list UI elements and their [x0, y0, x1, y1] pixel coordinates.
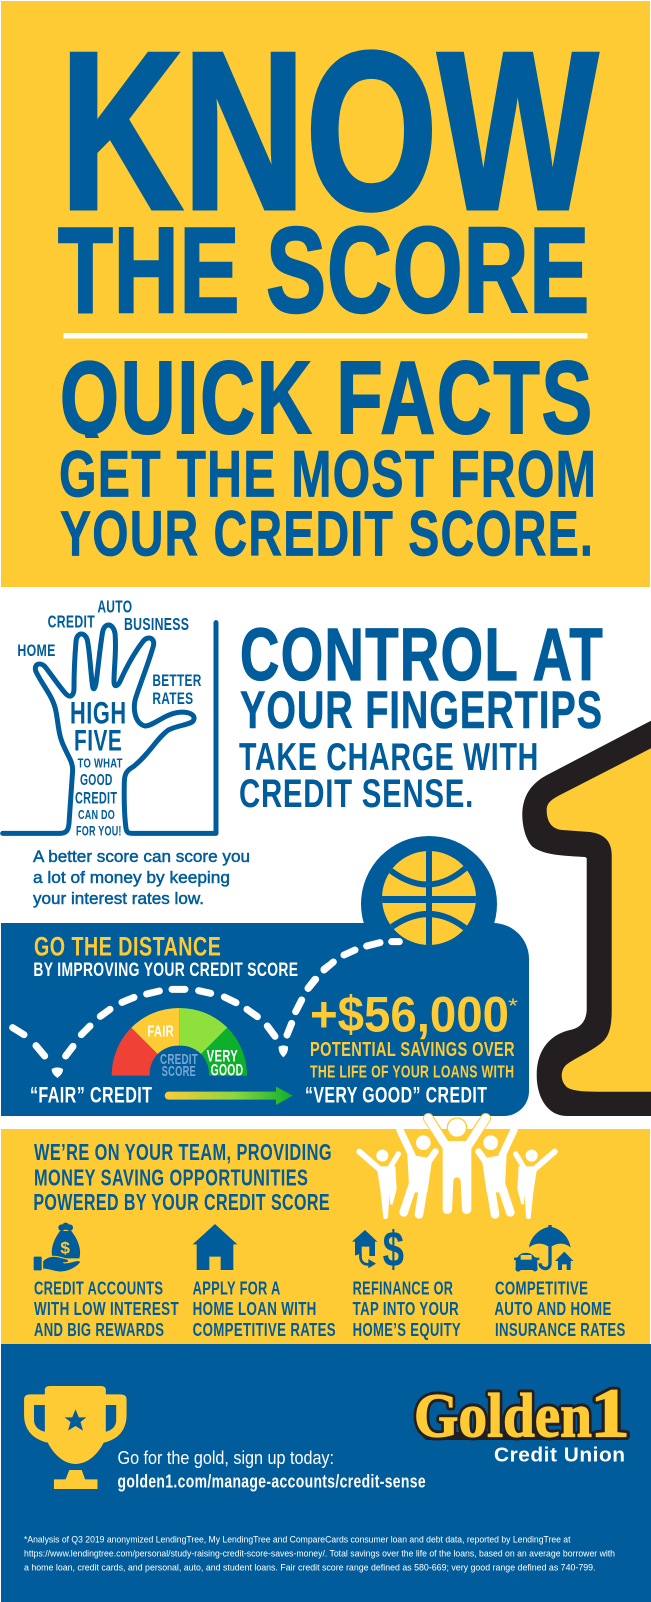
- heading: go the distance: GO THE DISTANCE: [34, 932, 221, 962]
- text: footnote: [24, 1535, 615, 1574]
- icon: house with arrow and dollar: [352, 1221, 404, 1277]
- bounce path left: [13, 966, 328, 1078]
- icon: basketball: [361, 836, 497, 945]
- text: apply for a home loan: [193, 1277, 336, 1340]
- heading: on your team: MONEY SAVING OPPORTUNITIES: [34, 1164, 308, 1190]
- text: high five to what good credit can do for you: HIGH: [70, 695, 127, 730]
- text: refinance: REFINANCE OR: [353, 1277, 453, 1298]
- figure: small right: [516, 1150, 555, 1219]
- logo: Golden 1 Credit Union: [414, 1376, 630, 1467]
- panel: go the distance: [1, 836, 529, 1116]
- label: BETTER RATES: [152, 671, 202, 708]
- text: high five to what good credit can do for you: GOOD: [80, 772, 113, 789]
- text: call to action: [118, 1448, 426, 1492]
- icon: umbrella over car and home: [514, 1225, 573, 1272]
- icon: money bag and hand: [34, 1223, 81, 1272]
- text: better score body: your interest rates low.: [33, 889, 204, 908]
- label: HOME: HOME: [17, 641, 56, 660]
- text: potential savings: THE LIFE OF YOUR LOANS WITH: [310, 1061, 514, 1081]
- icon: house with arrow and dollar: $: [383, 1221, 404, 1277]
- text: better score body: A better score can score you: [33, 847, 250, 866]
- heading: control at your fingertips: [239, 613, 604, 816]
- bounce path right: [308, 942, 399, 988]
- chart: credit score gauge: CREDIT: [160, 1052, 198, 1068]
- text: high five to what good credit can do for you: CREDIT: [75, 789, 117, 807]
- text: high five to what good credit can do for you: CAN DO: [78, 807, 115, 822]
- text: refinance: HOME’S EQUITY: [353, 1319, 461, 1340]
- text: footnote: *Analysis of Q3 2019 anonymized LendingTree, My LendingTree and CompareCards consumer loan and debt data, reported by LendingTree at: [24, 1535, 571, 1546]
- heading: on your team: WE’RE ON YOUR TEAM, PROVIDING: [34, 1139, 332, 1165]
- chart: credit score gauge: VERY: [207, 1047, 238, 1066]
- icon: house: [193, 1224, 237, 1270]
- text: high five to what good credit can do for you: FIVE: [74, 725, 122, 758]
- stat: savings amount: *: [508, 995, 518, 1018]
- text: footnote: a home loan, credit cards, and personal, auto, and student loans. Fair credit score range defined as 580-669; very good range defined as 740-799.: [24, 1563, 596, 1574]
- text: apply for a home loan: HOME LOAN WITH: [193, 1298, 317, 1319]
- panel: header: [1, 1, 650, 587]
- stat: savings amount: +$56,000: [310, 987, 509, 1043]
- text: better score body: [33, 847, 250, 908]
- panel: footer: [1, 1344, 651, 1602]
- arrow: fair to very good: [165, 1087, 293, 1105]
- figure: tall left: [400, 1130, 435, 1214]
- figure: tall right: [479, 1130, 514, 1214]
- text: high five to what good credit can do for you: TO WHAT: [78, 755, 123, 770]
- logo: Golden 1 Credit Union: 1: [590, 1376, 630, 1452]
- text: credit accounts: [34, 1277, 179, 1340]
- logo: Golden 1 Credit Union: Golden: [414, 1382, 592, 1450]
- text: high five to what good credit can do for you: FOR YOU!: [76, 823, 122, 838]
- chart: credit score gauge: SCORE: [162, 1064, 196, 1080]
- text: credit accounts: CREDIT ACCOUNTS: [34, 1277, 163, 1298]
- icon: trophy: [24, 1386, 127, 1489]
- panel: high five hand: [3, 596, 216, 838]
- label: fair credit: “FAIR” CREDIT: [30, 1083, 152, 1108]
- label: BETTER RATES: BETTER: [152, 671, 202, 690]
- label: BUSINESS: BUSINESS: [124, 614, 189, 634]
- text: high five to what good credit can do for you: [70, 695, 127, 838]
- label: AUTO: AUTO: [97, 596, 132, 616]
- text: insurance: COMPETITIVE: [495, 1277, 588, 1298]
- logo: Golden 1 Credit Union: Golden: [414, 1382, 592, 1450]
- text: potential savings: POTENTIAL SAVINGS OVER: [310, 1038, 515, 1061]
- text: call to action: Go for the gold, sign up today:: [118, 1448, 334, 1468]
- heading: control at your fingertips: TAKE CHARGE WITH: [239, 736, 539, 779]
- heading: on your team: [33, 1139, 332, 1215]
- subheading: improving credit score: BY IMPROVING YOUR CREDIT SCORE: [33, 960, 298, 981]
- text: potential savings: [310, 1038, 515, 1081]
- text: better score body: a lot of money by keeping: [33, 868, 230, 887]
- chart: credit score gauge: GOOD: [211, 1061, 243, 1079]
- heading: on your team: POWERED BY YOUR CREDIT SCORE: [33, 1189, 330, 1215]
- text: refinance: TAP INTO YOUR: [353, 1298, 459, 1319]
- icon: hand outline: [3, 623, 216, 833]
- logo: Golden 1 Credit Union: 1: [590, 1376, 630, 1452]
- chart: credit score gauge: FAIR: [147, 1024, 174, 1041]
- heading: control at your fingertips: CREDIT SENSE.: [239, 772, 474, 816]
- chart: credit score gauge: [112, 1008, 247, 1080]
- text: call to action: golden1.com/manage-accounts/credit-sense: [118, 1470, 426, 1492]
- label: CREDIT: CREDIT: [48, 611, 95, 631]
- label: BETTER RATES: RATES: [152, 689, 193, 708]
- text: credit accounts: AND BIG REWARDS: [34, 1319, 164, 1340]
- text: apply for a home loan: APPLY FOR A: [193, 1277, 281, 1298]
- text: refinance: [353, 1277, 461, 1340]
- text: insurance: [494, 1277, 626, 1340]
- icon: big number one: [522, 721, 651, 1116]
- text: credit accounts: WITH LOW INTEREST: [34, 1298, 179, 1319]
- figure: small left: [359, 1150, 398, 1219]
- logo: Golden 1 Credit Union: Credit Union: [494, 1444, 626, 1467]
- figure: centre: [428, 1117, 486, 1214]
- text: apply for a home loan: COMPETITIVE RATES: [193, 1319, 336, 1340]
- icon: money bag and hand: $: [60, 1239, 71, 1258]
- icon: cheering team: [359, 1117, 555, 1219]
- label: very good credit: “VERY GOOD” CREDIT: [305, 1083, 487, 1108]
- panel: team: [1, 1117, 650, 1344]
